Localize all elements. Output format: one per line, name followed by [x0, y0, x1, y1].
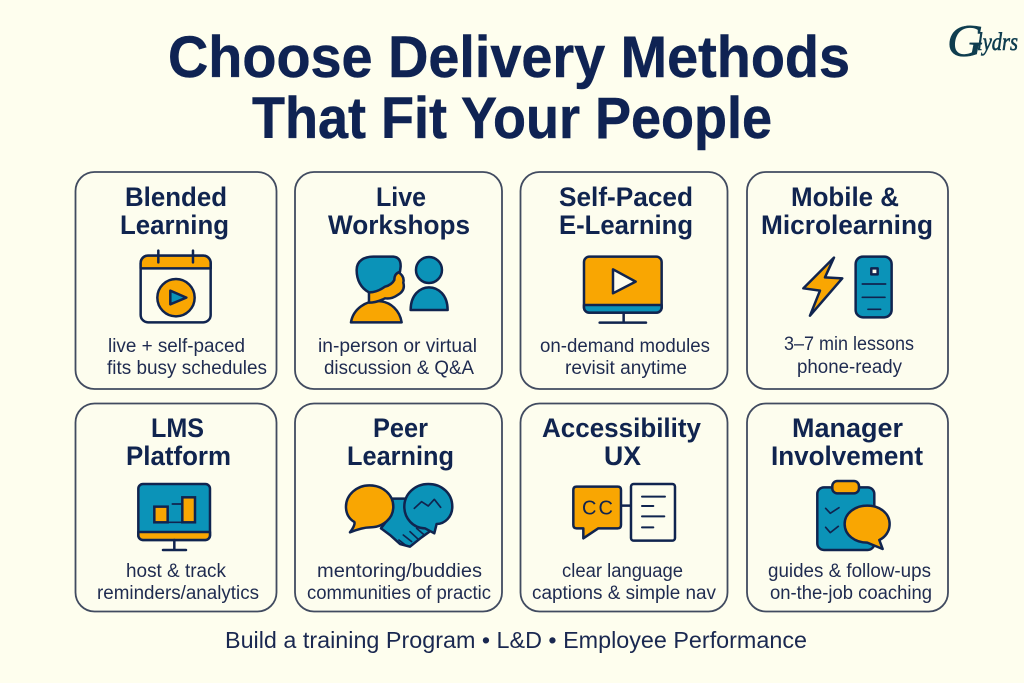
panel: Mobile & Microlearning — [747, 172, 948, 389]
caption: Accessibility UX: clear language — [562, 561, 683, 582]
logo: Glydrs signature: G — [947, 15, 983, 66]
icon: calendar with play button — [141, 251, 211, 322]
icon: video monitor — [584, 257, 662, 323]
heading: Live Workshops — [328, 182, 470, 240]
panel: Accessibility UX — [520, 404, 728, 612]
heading: LMS Platform: LMS — [151, 413, 204, 443]
heading: Live Workshops: Workshops — [328, 210, 470, 240]
heading: LMS Platform — [126, 413, 231, 471]
icon: captions bubble and document — [573, 484, 675, 541]
heading: Blended Learning: Blended — [125, 182, 227, 212]
caption: Self-Paced E-Learning: on-demand modules — [540, 336, 710, 357]
heading: Manager Involvement — [771, 413, 923, 471]
caption: Peer Learning: mentoring/buddies — [317, 561, 482, 582]
caption: Mobile & Microlearning — [784, 334, 914, 378]
heading: Mobile & Microlearning: Mobile & — [791, 182, 899, 212]
caption: LMS Platform: host & track — [126, 561, 226, 582]
caption: Blended Learning — [107, 336, 267, 379]
heading: Manager Involvement: Manager — [792, 413, 903, 443]
caption: Manager Involvement: guides & follow-ups — [768, 561, 931, 582]
panel: Manager Involvement — [747, 404, 948, 612]
heading: Manager Involvement: Involvement — [771, 441, 923, 471]
caption: LMS Platform: reminders/analytics — [97, 583, 259, 604]
heading: Blended Learning: Learning — [120, 210, 229, 240]
panel: Blended Learning — [76, 172, 276, 389]
heading: Blended Learning — [120, 182, 229, 240]
caption: Live Workshops: in-person or virtual — [318, 336, 477, 357]
caption: Self-Paced E-Learning: revisit anytime — [565, 358, 687, 379]
panel: Self-Paced E-Learning — [520, 172, 728, 389]
caption: LMS Platform — [97, 561, 259, 604]
icon: clipboard with speech bubble — [817, 481, 890, 550]
title: Choose Delivery Methods — [168, 25, 850, 90]
icon: lightning bolt and phone — [803, 257, 892, 317]
heading: Peer Learning: Learning — [347, 441, 454, 471]
panel: Live Workshops — [295, 172, 502, 389]
heading: Mobile & Microlearning: Microlearning — [761, 210, 933, 240]
heading: Accessibility UX — [542, 413, 701, 471]
heading: LMS Platform: Platform — [126, 441, 231, 471]
heading: Mobile & Microlearning — [761, 182, 933, 240]
caption: Peer Learning — [307, 561, 491, 604]
panel: LMS Platform — [76, 404, 276, 612]
heading: Accessibility UX: UX — [604, 441, 641, 471]
caption: Live Workshops — [318, 336, 477, 379]
caption: Mobile & Microlearning: 3–7 min lessons — [784, 334, 914, 355]
logo: Glydrs signature — [947, 15, 1018, 66]
heading: Accessibility UX: Accessibility — [542, 413, 701, 443]
caption: Self-Paced E-Learning — [540, 336, 710, 379]
icon: analytics monitor — [138, 484, 210, 550]
icon: handshake with speech bubbles — [346, 484, 452, 547]
heading: Peer Learning: Peer — [373, 413, 428, 443]
heading: Peer Learning — [347, 413, 454, 471]
caption: Mobile & Microlearning: phone-ready — [797, 357, 902, 378]
title — [168, 25, 850, 151]
title: That Fit Your People — [252, 86, 772, 151]
caption: Blended Learning: fits busy schedules — [107, 358, 267, 379]
caption: Manager Involvement: on-the-job coaching — [770, 583, 932, 604]
icon: captions bubble and document: CC — [582, 498, 613, 520]
caption: Accessibility UX — [532, 561, 716, 604]
heading: Live Workshops: Live — [376, 182, 426, 212]
heading: Self-Paced E-Learning — [559, 182, 693, 240]
footer tagline: Build a training Program • L&D • Employee Performance — [225, 627, 807, 653]
heading: Self-Paced E-Learning: E-Learning — [559, 210, 693, 240]
caption: Peer Learning: communities of practic — [307, 583, 491, 604]
caption: Live Workshops: discussion & Q&A — [324, 358, 474, 379]
caption: Manager Involvement — [768, 561, 932, 604]
icon: two people — [351, 257, 448, 322]
caption: Accessibility UX: captions & simple nav — [532, 583, 716, 604]
panel: Peer Learning — [295, 404, 502, 612]
heading: Self-Paced E-Learning: Self-Paced — [559, 182, 693, 212]
caption: Blended Learning: live + self-paced — [108, 336, 245, 357]
